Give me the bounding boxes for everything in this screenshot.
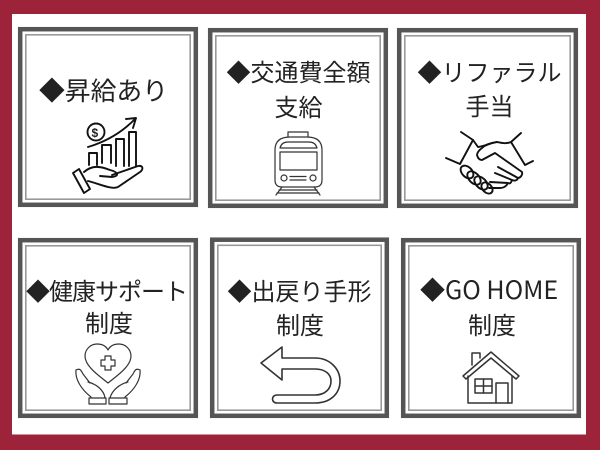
panel: 交通費全額支給 — [210, 30, 386, 206]
heading: second line: 制度 — [468, 306, 516, 341]
heading: 出戻り手形制度: ◆出戻り手形 — [228, 272, 372, 307]
icon: train — [275, 132, 322, 195]
panel: リファラル手当 — [399, 30, 576, 206]
panel: 健康サポート制度 — [20, 240, 196, 416]
icon: rising salary in hand: $ — [92, 126, 98, 140]
heading: 健康サポート制度: ◆健康サポート — [26, 272, 188, 307]
heading: 昇給あり: ◆昇給あり — [39, 71, 168, 108]
panel: 昇給あり — [20, 29, 196, 205]
heading: second line: 制度 — [85, 304, 133, 339]
heading: リファラル手当: ◆リファラル — [418, 53, 562, 88]
heading: second line: 手当 — [466, 87, 514, 122]
heading: GO HOME制度: ◆GO HOME — [420, 271, 558, 307]
icon: handshake — [446, 132, 533, 196]
heading: 交通費全額支給: ◆交通費全額 — [226, 53, 370, 88]
icon: heart in caring hands — [76, 344, 140, 404]
heading: second line: 支給 — [274, 88, 322, 123]
icon: rising salary in hand — [73, 118, 142, 193]
panel: GO HOME制度 — [403, 240, 579, 416]
heading: second line: 制度 — [276, 306, 324, 341]
icon: house — [463, 352, 519, 403]
icon: return arrow — [261, 347, 340, 403]
panel: 出戻り手形制度 — [212, 240, 387, 416]
